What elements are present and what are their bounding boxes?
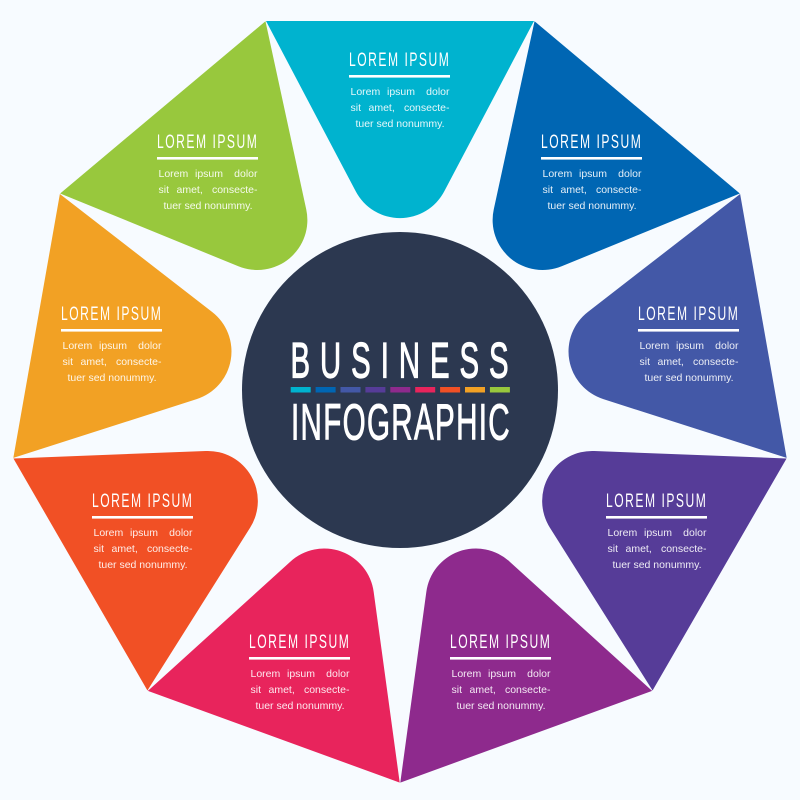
text block: magenta segment: consecte- xyxy=(505,684,551,696)
text block: violet segment xyxy=(606,490,707,571)
panel: cyan top segment xyxy=(266,21,534,218)
text block: violet segment: dolor xyxy=(683,527,707,539)
text block: cyan segment: ipsum xyxy=(387,86,415,98)
text block: magenta segment: dolor xyxy=(527,668,551,680)
text block: green segment xyxy=(157,131,258,212)
text block: violet segment: Lorem xyxy=(608,527,638,539)
text block: orange segment: ipsum xyxy=(99,340,127,352)
text block: green segment: ipsum xyxy=(195,168,223,180)
text block: indigo segment: consecte- xyxy=(693,356,739,368)
text block: violet segment: tuer sed nonummy. xyxy=(612,559,702,571)
text block: pink segment: dolor xyxy=(326,668,350,680)
text block: blue segment: Lorem xyxy=(542,168,573,180)
text block: green segment: tuer sed nonummy. xyxy=(163,200,253,212)
text block: pink segment: amet, xyxy=(268,684,295,696)
text block: pink segment: tuer sed nonummy. xyxy=(255,700,345,712)
text block: blue segment: ipsum xyxy=(579,168,607,180)
text block: violet segment: amet, xyxy=(626,543,652,555)
text block: cyan segment: LOREM IPSUM xyxy=(349,49,449,71)
panel: indigo segment xyxy=(546,194,787,492)
panel: pink segment xyxy=(148,506,467,783)
title: INFOGRAPHIC: INFOGRAPHIC xyxy=(291,393,510,451)
text block: pink segment: Lorem xyxy=(250,668,281,680)
text block: indigo segment: LOREM IPSUM xyxy=(638,303,738,325)
panel: red-orange segment xyxy=(13,360,318,691)
text block: pink segment: ipsum xyxy=(287,668,315,680)
text block: magenta segment: Lorem xyxy=(452,668,482,680)
text block: red-orange segment: amet, xyxy=(112,543,138,555)
text block: orange segment: tuer sed nonummy. xyxy=(67,372,157,384)
text block: red-orange segment: sit xyxy=(94,543,104,555)
text block: violet segment: ipsum xyxy=(644,527,672,539)
text block: magenta segment xyxy=(450,631,551,712)
text block: red-orange segment: dolor xyxy=(169,527,193,539)
text block: blue segment: LOREM IPSUM xyxy=(541,131,641,153)
text block: green segment: sit xyxy=(158,184,169,196)
text block: blue segment: tuer sed nonummy. xyxy=(547,200,637,212)
text block: blue segment xyxy=(541,131,642,212)
text block: magenta segment: amet, xyxy=(470,684,496,696)
text block: cyan segment: dolor xyxy=(426,86,450,98)
panel: magenta segment xyxy=(333,506,652,783)
text block: violet segment: consecte- xyxy=(661,543,707,555)
text block: orange segment: amet, xyxy=(80,356,107,368)
text block: red-orange segment: Lorem xyxy=(94,527,124,539)
text block: indigo segment xyxy=(638,303,739,384)
text block: violet segment: sit xyxy=(608,543,618,555)
text block: blue segment: amet, xyxy=(560,184,587,196)
text block: indigo segment: sit xyxy=(640,356,650,368)
text block: pink segment: sit xyxy=(250,684,261,696)
text block: indigo segment: ipsum xyxy=(676,340,704,352)
text block: cyan segment: tuer sed nonummy. xyxy=(355,118,445,130)
text block: magenta segment: LOREM IPSUM xyxy=(450,631,550,653)
text block: pink segment: consecte- xyxy=(304,684,350,696)
colour dash row xyxy=(291,387,510,392)
text block: cyan segment: Lorem xyxy=(350,86,381,98)
text block: pink segment xyxy=(249,631,350,712)
text block: green segment: Lorem xyxy=(158,168,189,180)
text block: magenta segment: sit xyxy=(452,684,462,696)
text block: orange segment: LOREM IPSUM xyxy=(61,303,161,325)
text block: green segment: dolor xyxy=(234,168,258,180)
text block: blue segment: dolor xyxy=(618,168,642,180)
text block: magenta segment: tuer sed nonummy. xyxy=(456,700,546,712)
text block: orange segment: sit xyxy=(62,356,73,368)
panel: green segment xyxy=(60,21,392,344)
text block: green segment: consecte- xyxy=(212,184,258,196)
text block: red-orange segment: tuer sed nonummy. xyxy=(98,559,188,571)
text block: orange segment xyxy=(61,303,162,384)
text block: red-orange segment xyxy=(92,490,193,571)
panel: blue segment xyxy=(408,21,740,344)
text block: orange segment: dolor xyxy=(138,340,162,352)
text block: cyan segment xyxy=(349,49,450,130)
text block: indigo segment: tuer sed nonummy. xyxy=(644,372,734,384)
text block: cyan segment: consecte- xyxy=(404,102,450,114)
text block: blue segment: sit xyxy=(542,184,553,196)
text block: red-orange segment: consecte- xyxy=(147,543,193,555)
text block: pink segment: LOREM IPSUM xyxy=(249,631,349,653)
central circle xyxy=(242,232,558,548)
text block: cyan segment: amet, xyxy=(368,102,395,114)
text block: indigo segment: amet, xyxy=(658,356,684,368)
text block: magenta segment: ipsum xyxy=(488,668,516,680)
text block: indigo segment: Lorem xyxy=(640,340,670,352)
panel: orange segment xyxy=(13,194,254,492)
text block: green segment: LOREM IPSUM xyxy=(157,131,257,153)
text block: cyan segment: sit xyxy=(350,102,361,114)
text block: red-orange segment: LOREM IPSUM xyxy=(92,490,192,512)
text block: red-orange segment: ipsum xyxy=(130,527,158,539)
text block: orange segment: consecte- xyxy=(116,356,162,368)
title: BUSINESS: BUSINESS xyxy=(290,332,509,389)
text block: indigo segment: dolor xyxy=(715,340,739,352)
text block: blue segment: consecte- xyxy=(596,184,642,196)
text block: violet segment: LOREM IPSUM xyxy=(606,490,706,512)
text block: green segment: amet, xyxy=(176,184,203,196)
text block: orange segment: Lorem xyxy=(62,340,93,352)
panel: violet segment xyxy=(482,360,787,691)
